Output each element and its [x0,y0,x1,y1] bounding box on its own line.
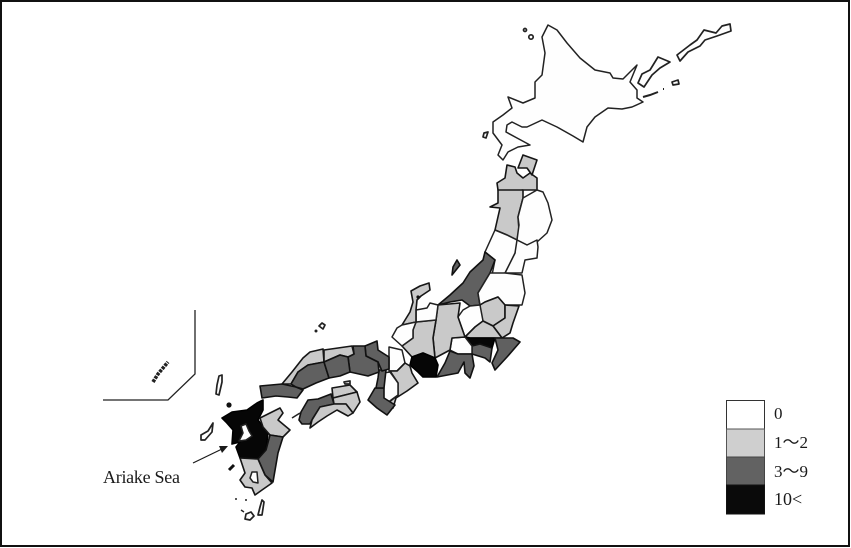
region: Kanto and Chubu [392,252,525,378]
region: islands [201,323,325,520]
legend [726,400,808,514]
legend label: 1 to 2: 1～2 [774,433,808,452]
legend label: 10 or more: 10< [774,489,802,509]
legend label: 3 to 9: 3～9 [774,462,808,481]
legend swatch: 3 to 9 [726,457,764,485]
inset: Okinawa islands [103,310,195,400]
region: Tohoku [485,155,552,275]
legend label: 0: 0 [774,404,782,423]
legend swatch: 0 [726,400,764,429]
legend swatch: 10 or more [726,485,764,514]
region: Chugoku [260,346,354,398]
region: Shikoku [299,381,360,428]
arrow: Ariake Sea pointer [193,446,228,463]
legend swatch: 1 to 2 [726,429,764,457]
region: Hokkaido [483,24,731,160]
region: Kinki [348,341,418,415]
map of Japan [103,24,731,520]
label: Ariake Sea: Ariake Sea [103,467,180,487]
region: Kyushu [222,400,290,495]
